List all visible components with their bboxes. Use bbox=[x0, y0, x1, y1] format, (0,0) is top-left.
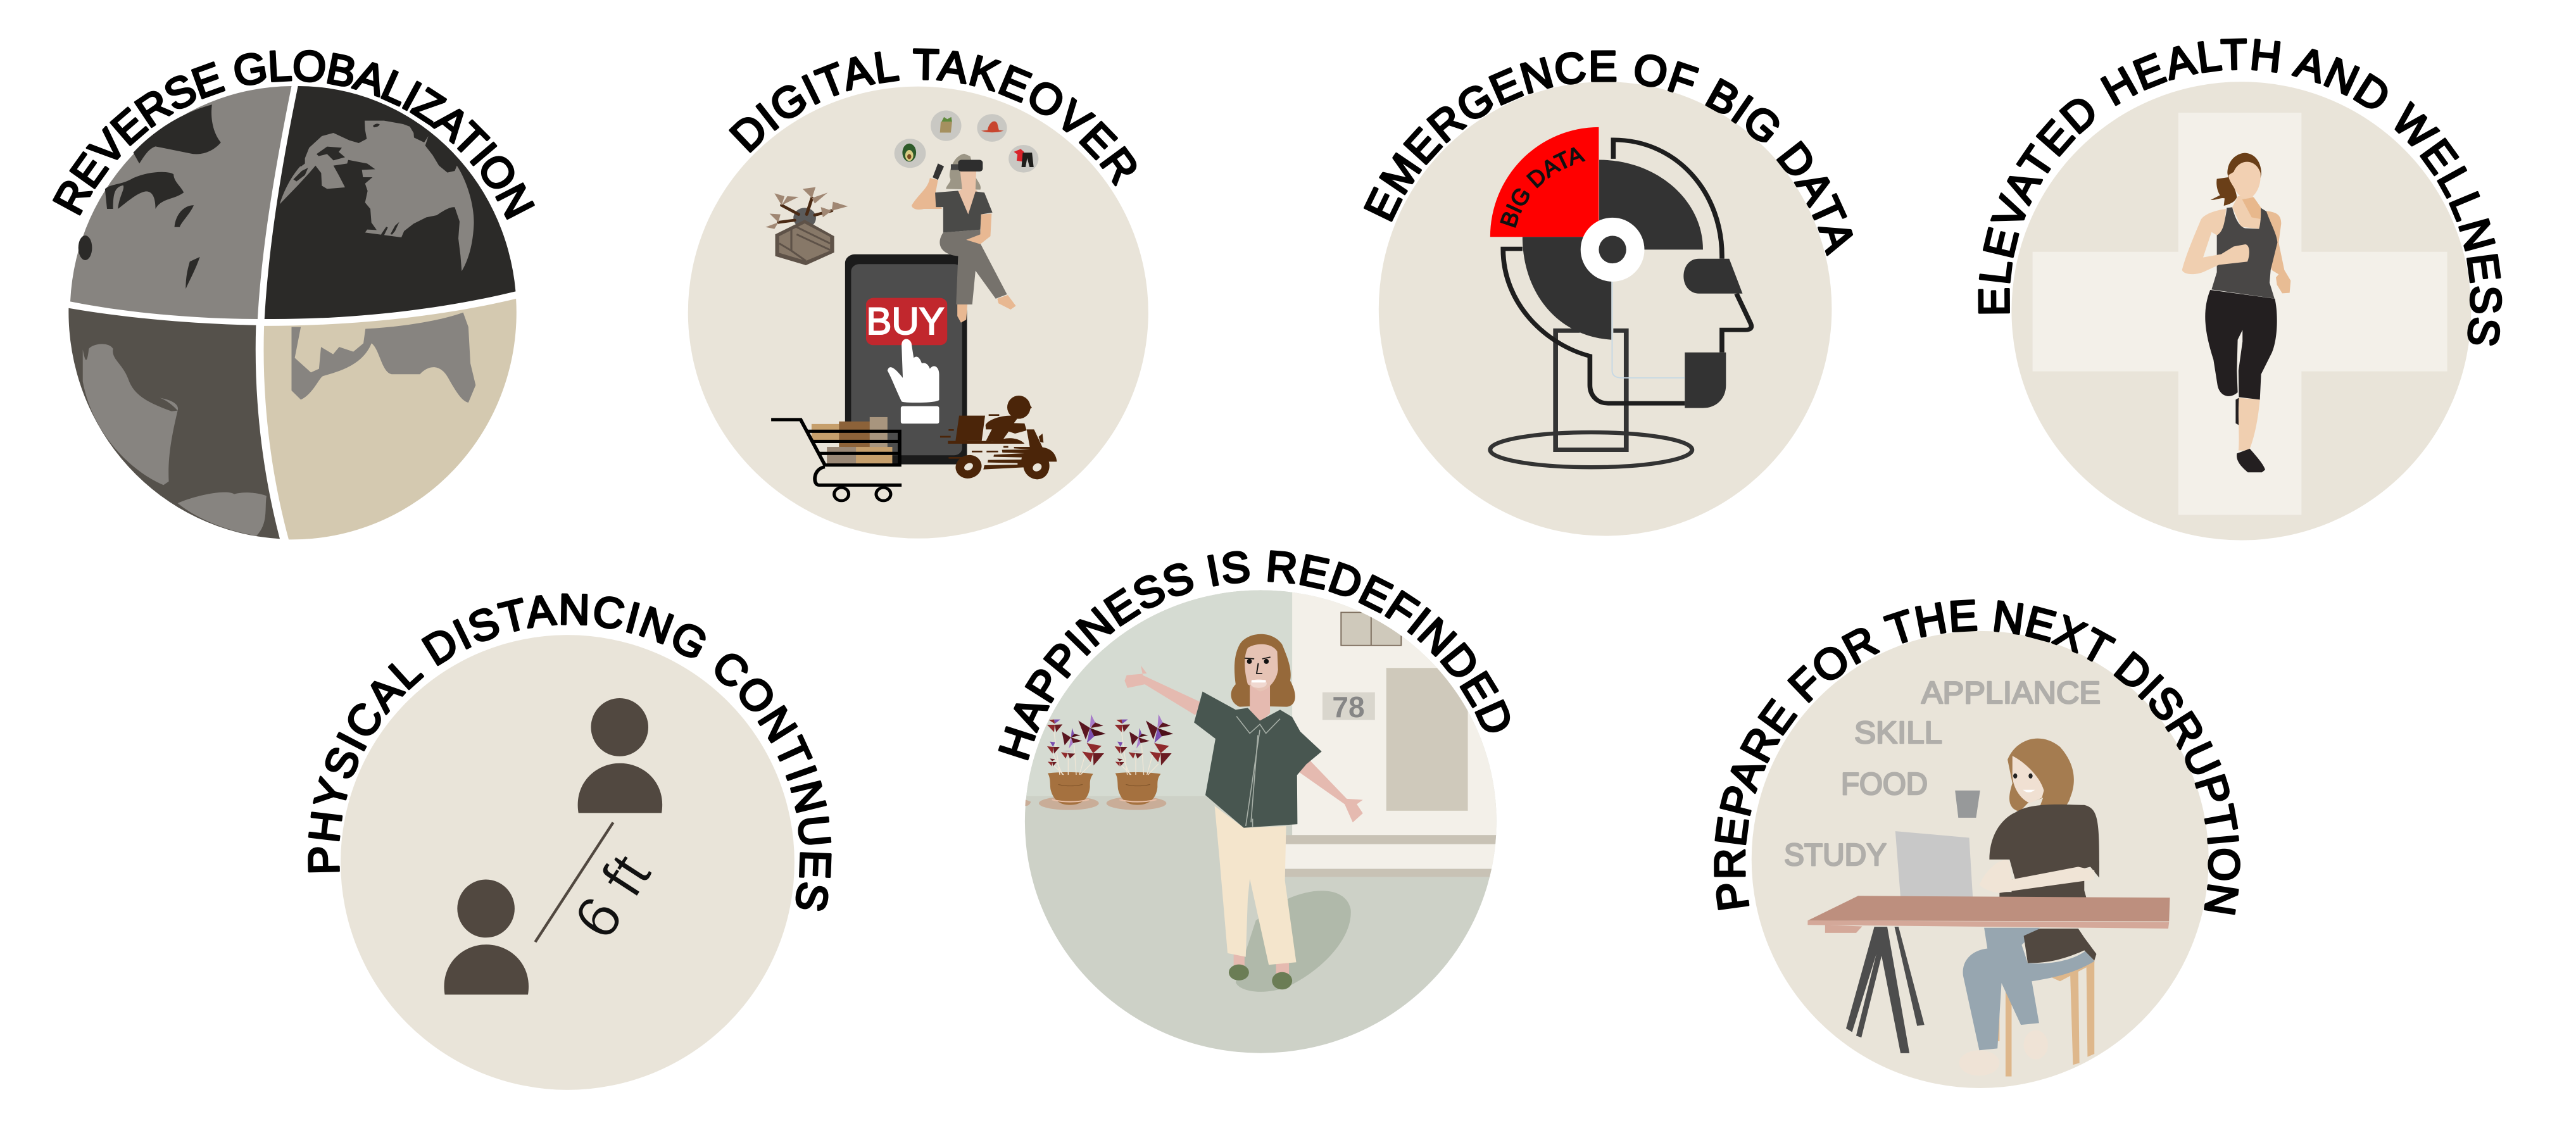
glass bbox=[1955, 791, 1980, 818]
continents: top left bbox=[79, 104, 221, 289]
woman with open arms bbox=[1124, 634, 1363, 989]
background circle bbox=[688, 87, 1148, 539]
icon: pointing hand bbox=[888, 339, 939, 423]
panel: happiness is redefined bbox=[998, 550, 1511, 1053]
hair and face bbox=[2007, 739, 2074, 811]
title: physical distancing continues: PHYSICAL DISTANCING CONTINUES bbox=[308, 593, 832, 911]
delivery scooter bbox=[940, 396, 1057, 481]
title: happiness is redefined: HAPPINESS IS REDEFINDED bbox=[998, 550, 1511, 761]
panel: prepare for the next disruption bbox=[1714, 599, 2240, 1088]
title: reverse globalization: REVERSE GLOBALIZATION bbox=[52, 49, 535, 220]
background circle bbox=[2011, 82, 2471, 541]
distance line bbox=[535, 822, 613, 942]
label: food: FOOD bbox=[1841, 767, 1928, 801]
jeans bbox=[1963, 928, 2094, 1050]
background circle bbox=[341, 635, 795, 1090]
eye bbox=[1683, 259, 1742, 294]
potted plants bbox=[1025, 714, 1173, 810]
label: BUY: BUY bbox=[866, 300, 945, 342]
red brain sector bbox=[1490, 127, 1599, 237]
icon bubbles bbox=[895, 110, 1038, 173]
circuit line bbox=[1612, 282, 1685, 378]
panel: emergence of big data bbox=[1364, 50, 1854, 536]
sweater upper bbox=[1989, 805, 2099, 898]
drone with parcel bbox=[765, 187, 848, 265]
title: elevated health and wellness: ELEVATED HEALTH AND WELLNESS bbox=[1978, 38, 2502, 346]
background circle bbox=[1752, 631, 2209, 1088]
sweater lower bbox=[2024, 929, 2096, 963]
happiness illustration bbox=[1022, 586, 1506, 1058]
panel: digital takeover bbox=[688, 48, 1148, 539]
label: study: STUDY bbox=[1784, 838, 1887, 872]
globe illustration bbox=[68, 86, 517, 539]
continents: top right bbox=[280, 121, 474, 271]
globe quadrant: bottom left bbox=[68, 308, 280, 539]
laptop bbox=[1895, 831, 2009, 906]
label: big data on sector: BIG DATA bbox=[1500, 147, 1585, 228]
dark brain sectors bbox=[1523, 160, 1703, 340]
continents: bottom left bbox=[83, 344, 267, 536]
digital takeover illustration bbox=[688, 87, 1148, 539]
title: prepare for the next disruption: PREPARE FOR THE NEXT DISRUPTION bbox=[1714, 599, 2240, 915]
table top bbox=[1807, 896, 2170, 933]
globe quadrant: bottom right bbox=[264, 299, 517, 539]
wall and floor bbox=[1022, 586, 1506, 1058]
distancing illustration bbox=[341, 635, 795, 1090]
table legs bbox=[1846, 927, 1925, 1053]
icon: upper person bbox=[578, 698, 662, 813]
panel: reverse globalization bbox=[52, 49, 535, 539]
icon: lower person bbox=[444, 879, 529, 994]
feet bbox=[1959, 1030, 2048, 1075]
stand bbox=[1490, 330, 1692, 467]
label: appliance: APPLIANCE bbox=[1921, 676, 2101, 710]
background circle bbox=[1379, 82, 1831, 536]
prepare illustration bbox=[1752, 631, 2209, 1088]
runner upper body bbox=[2182, 153, 2290, 299]
globe quadrant: top right bbox=[265, 86, 515, 319]
head outline bbox=[1503, 140, 1751, 403]
runner legs bbox=[2205, 290, 2277, 472]
panel: physical distancing continues bbox=[308, 593, 832, 1090]
stool bbox=[1995, 957, 2094, 1077]
building bbox=[1285, 586, 1503, 877]
shopping cart bbox=[771, 417, 902, 501]
smartphone bbox=[845, 254, 967, 465]
title: emergence of big data: EMERGENCE OF BIG DATA bbox=[1364, 50, 1854, 256]
health illustration bbox=[2011, 82, 2471, 541]
jaw bbox=[1685, 353, 1726, 408]
big data head illustration bbox=[1379, 82, 1831, 536]
label: 6 ft: 6 ft bbox=[561, 842, 663, 950]
panel: elevated health and wellness bbox=[1978, 38, 2502, 541]
centre ring bbox=[1581, 218, 1644, 282]
arms bbox=[1979, 860, 2094, 893]
shadow bbox=[1236, 891, 1351, 992]
title: digital takeover: DIGITAL TAKEOVER bbox=[729, 48, 1137, 186]
medical cross bbox=[2033, 113, 2447, 515]
globe quadrant: top left bbox=[70, 86, 291, 319]
woman with VR headset bbox=[912, 154, 1016, 323]
label: house number 78: 78 bbox=[1332, 691, 1365, 723]
continents: bottom right bbox=[291, 313, 475, 403]
skill labels bbox=[1784, 676, 2101, 872]
buy button bbox=[866, 298, 947, 345]
label: skill: SKILL bbox=[1854, 716, 1942, 750]
